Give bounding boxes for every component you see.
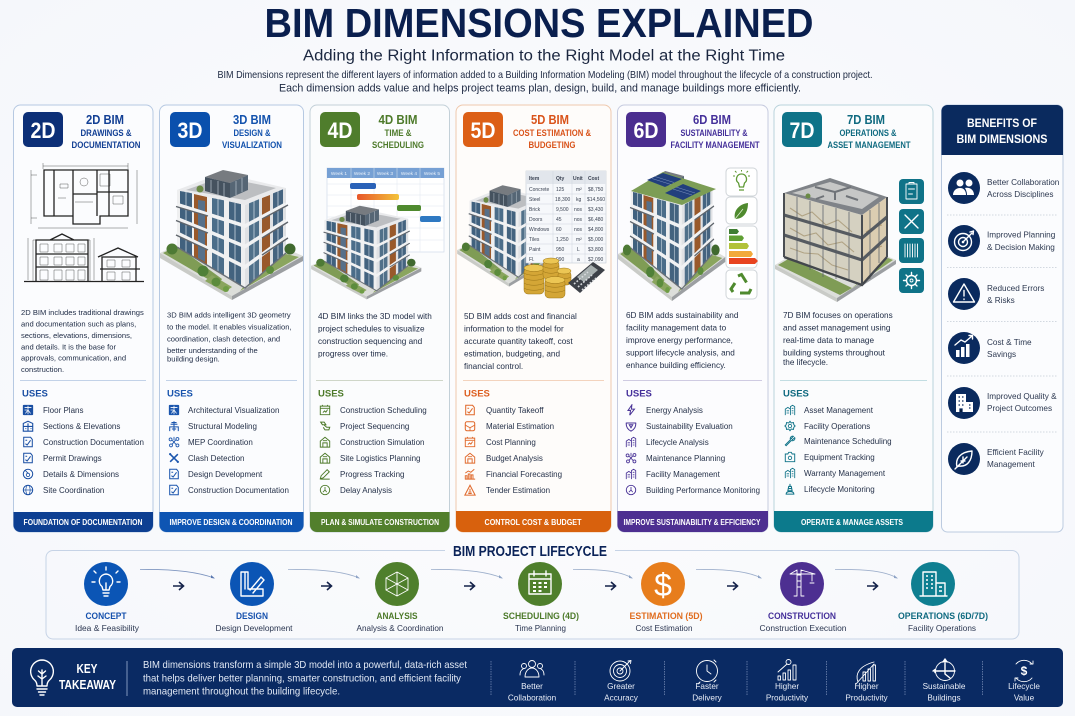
badge: 3D: 3D	[178, 118, 202, 143]
key takeaway text	[143, 660, 467, 698]
value: better collaboration: Collaboration	[508, 694, 557, 702]
heading: 5D BIM: 5D BIM	[531, 113, 569, 127]
badge: 3D	[170, 112, 210, 147]
uses list	[167, 388, 289, 495]
value: faster delivery: Delivery	[692, 694, 723, 702]
panel: benefits	[942, 105, 1063, 532]
heading: 6D BIM: SUSTAINABILITY &	[680, 128, 748, 139]
description	[21, 308, 144, 374]
illustration: cost table: Qty	[556, 176, 565, 182]
illustration: cut-away building	[775, 178, 896, 302]
description: and documentation such as plans,	[21, 320, 136, 328]
use: Construction Documentation: Construction Documentation	[43, 438, 144, 447]
lifecycle frame	[46, 543, 1019, 639]
icon tile: equipment	[899, 238, 924, 263]
key takeaway label: TAKEAWAY	[59, 677, 116, 692]
use: Site Coordination: Site Coordination	[43, 486, 104, 495]
stage: concept: CONCEPT	[86, 611, 127, 621]
use: Lifecycle Analysis: Lifecycle Analysis	[646, 438, 709, 447]
stage: estimation: ESTIMATION (5D)	[630, 611, 702, 621]
stage: analysis: Analysis & Coordination	[356, 624, 444, 633]
key takeaway text: management throughout the building lifecycle.	[143, 686, 340, 698]
stage: scheduling: SCHEDULING (4D)	[503, 611, 579, 621]
description: 7D BIM focuses on operations	[783, 311, 893, 320]
benefit: quality: Project Outcomes	[987, 404, 1052, 413]
heading: 5D BIM: COST ESTIMATION &	[513, 128, 591, 139]
value: higher productivity	[766, 660, 809, 702]
use: Sections & Elevations: Sections & Elevations	[43, 422, 120, 431]
use: Construction Documentation: Construction Documentation	[188, 486, 289, 495]
badge: 7D: 7D	[790, 118, 814, 143]
badge: 2D: 2D	[30, 118, 56, 143]
illustration: cost table: $2,090	[588, 257, 604, 263]
illustration: cost table: Doors	[529, 217, 543, 223]
use: Facility Operations: Facility Operations	[804, 422, 870, 431]
icon tile: tools	[899, 209, 924, 234]
benefit: planning: & Decision Making	[987, 243, 1055, 252]
description: coordination, clash detection, and	[167, 334, 280, 344]
title: BIM DIMENSIONS EXPLAINED	[264, 0, 814, 46]
illustration: cost table: Brick	[529, 207, 541, 213]
use: Permit Drawings: Permit Drawings	[43, 454, 102, 463]
illustration: elevations	[24, 234, 144, 282]
stage: estimation: $	[654, 567, 672, 603]
illustration: cost table: $3,430	[588, 207, 604, 213]
value: sustainable buildings: Sustainable	[923, 682, 966, 691]
footer band	[14, 512, 153, 532]
stage: operations: OPERATIONS (6D/7D)	[898, 611, 988, 621]
heading: 6D BIM: 6D BIM	[693, 113, 731, 127]
footer band: PLAN & SIMULATE CONSTRUCTION	[321, 517, 439, 527]
illustration: cost table: Tiles	[529, 237, 540, 243]
use: Warranty Management: Warranty Management	[804, 469, 886, 478]
description: the lifecycle.	[783, 358, 828, 367]
description: building systems throughout	[783, 348, 886, 358]
value: sustainable buildings	[923, 659, 966, 702]
description: information to the model for	[464, 324, 564, 334]
illustration: cost table: L	[577, 247, 580, 253]
stage: operations	[898, 562, 988, 633]
stage: concept	[75, 562, 140, 633]
description: financial control.	[464, 362, 523, 371]
heading: 5D BIM: BUDGETING	[528, 140, 576, 151]
subtitle: Adding the Right Information to the Right Model at the Right Time	[303, 48, 785, 64]
value: lifecycle value: $	[1021, 664, 1028, 678]
footer band	[618, 511, 768, 532]
badge: 4D	[320, 112, 360, 147]
uses list: USES	[464, 388, 490, 400]
lifecycle title: BIM PROJECT LIFECYCLE	[453, 543, 607, 560]
footer band	[160, 512, 304, 532]
footer band	[456, 511, 611, 532]
benefits header: BENEFITS OF	[967, 116, 1037, 130]
footer band: IMPROVE DESIGN & COORDINATION	[170, 517, 292, 527]
use: Sustainability Evaluation: Sustainability Evaluation	[646, 422, 733, 431]
uses list	[626, 388, 760, 495]
stage: design: DESIGN	[236, 611, 268, 621]
use: Building Performance Monitoring: Building Performance Monitoring	[646, 486, 760, 495]
description	[464, 312, 577, 371]
benefit: collaboration: Across Disciplines	[987, 190, 1053, 199]
heading: 2D BIM: 2D BIM	[86, 113, 124, 127]
illustration: cost table: 950	[556, 247, 565, 253]
illustration: cost table: Cost	[588, 176, 599, 182]
stage: construction: Construction Execution	[760, 624, 847, 633]
uses list: USES	[318, 388, 344, 400]
key takeaway text: BIM dimensions transform a simple 3D model into a powerful, data-rich asset	[143, 660, 467, 671]
use: Construction Scheduling: Construction Scheduling	[340, 406, 427, 415]
icon tile: energy rating	[726, 226, 758, 268]
illustration: building	[311, 206, 421, 299]
intro text: BIM Dimensions represent the different layers of information added to a Building Information Modeling (BIM) model throughout the lifecycle of a construction project.	[218, 70, 872, 81]
description: 2D BIM includes traditional drawings	[21, 308, 144, 317]
illustration: cost table: a	[577, 257, 580, 263]
heading: 2D BIM: DRAWINGS &	[80, 128, 132, 139]
illustration: cost table: $8,750	[588, 187, 604, 193]
icon tile: recycling	[726, 270, 757, 299]
stage: analysis: ANALYSIS	[376, 611, 418, 621]
illustration: gold coins	[524, 258, 571, 298]
description: approvals, communication, and	[21, 354, 126, 362]
description: real-time data to manage	[783, 336, 874, 345]
heading: 6D BIM	[670, 113, 760, 151]
value: higher productivity: Productivity	[766, 694, 809, 702]
benefit: errors	[948, 278, 1044, 310]
use: MEP Coordination: MEP Coordination	[188, 438, 253, 447]
illustration: cost table: Paint	[529, 247, 541, 253]
illustration: cost table: Steel	[529, 197, 540, 203]
illustration: cost table: 125	[556, 187, 565, 193]
key takeaway bar	[12, 648, 1063, 707]
illustration: cost table: 45	[556, 217, 562, 223]
stage: construction: CONSTRUCTION	[768, 611, 836, 621]
use: Progress Tracking: Progress Tracking	[340, 470, 404, 479]
illustration: cost table: Windows	[529, 227, 550, 233]
flow arrow	[573, 569, 633, 590]
heading: 2D BIM	[72, 113, 141, 151]
heading: 3D BIM: VISUALIZATION	[222, 140, 282, 151]
badge: 5D	[463, 112, 503, 147]
panel: 3D BIM	[160, 105, 304, 532]
badge: 6D	[626, 112, 666, 147]
benefit: collaboration	[948, 172, 1060, 204]
footer band	[774, 511, 933, 532]
description	[626, 311, 739, 370]
use: Delay Analysis: Delay Analysis	[340, 486, 392, 495]
benefit: collaboration: Better Collaboration	[987, 178, 1060, 187]
description: support lifecycle analysis, and	[626, 348, 735, 358]
icon: key takeaway bulb	[31, 660, 53, 695]
description: project schedules to visualize	[318, 324, 425, 334]
key takeaway text: that helps deliver better planning, smarter construction, and efficient facility	[143, 674, 462, 684]
illustration: Gantt chart: Week 4	[401, 171, 417, 177]
value: higher productivity, growth	[845, 662, 889, 702]
benefit: cost and time	[948, 332, 1032, 364]
use: Equipment Tracking: Equipment Tracking	[804, 453, 875, 462]
heading: 6D BIM: FACILITY MANAGEMENT	[670, 140, 760, 151]
description	[783, 311, 893, 367]
illustration: cost table: 090	[556, 257, 565, 263]
description: and details. It is the base for	[21, 342, 116, 352]
benefit: cost and time: Cost & Time	[987, 338, 1032, 347]
illustration: cost table: $6,480	[588, 217, 604, 223]
illustration: cost table: $3,800	[588, 247, 604, 253]
description: and asset management using	[783, 324, 891, 332]
heading: 4D BIM: SCHEDULING	[372, 140, 424, 151]
illustration: cost table: 60	[556, 227, 562, 233]
flow arrow	[140, 569, 215, 590]
description: facility management data to	[626, 324, 727, 332]
use: Clash Detection: Clash Detection	[188, 454, 244, 463]
use: Tender Estimation: Tender Estimation	[486, 486, 550, 495]
use: Site Logistics Planning: Site Logistics Planning	[340, 454, 420, 463]
heading: 3D BIM: 3D BIM	[233, 113, 271, 127]
illustration: Gantt chart: Week 2	[354, 171, 370, 177]
use: Project Sequencing: Project Sequencing	[340, 422, 409, 431]
description: improve energy performance,	[626, 336, 733, 345]
uses list: USES	[22, 388, 48, 400]
value: greater accuracy: Greater	[607, 682, 635, 691]
description: progress over time.	[318, 350, 388, 358]
use: Floor Plans: Floor Plans	[43, 406, 83, 415]
use: Quantity Takeoff: Quantity Takeoff	[486, 406, 544, 415]
flow arrow	[835, 569, 898, 590]
key takeaway label: KEY	[76, 661, 98, 676]
use: Details & Dimensions: Details & Dimensions	[43, 470, 119, 479]
illustration: Gantt chart	[327, 168, 444, 252]
stage: construction	[760, 562, 847, 633]
value: lifecycle value	[1008, 660, 1040, 702]
value: better collaboration: Better	[521, 682, 543, 691]
icon tile: clipboard	[899, 179, 924, 204]
illustration: cost table: 9,500	[556, 207, 569, 213]
description: 5D BIM adds cost and financial	[464, 312, 577, 321]
icon tile: lightbulb	[726, 168, 757, 196]
illustration: cost table: Fl.	[529, 257, 535, 263]
footer band: FOUNDATION OF DOCUMENTATION	[24, 517, 142, 527]
footer band: CONTROL COST & BUDGET	[484, 517, 582, 527]
value: greater accuracy	[604, 660, 639, 702]
benefit: quality	[948, 387, 1057, 419]
footer band	[310, 512, 450, 532]
use: Facility Management: Facility Management	[646, 470, 721, 479]
benefit: facility management: Efficient Facility	[987, 448, 1045, 457]
benefits header	[942, 105, 1063, 155]
benefit: facility management: Management	[987, 460, 1036, 469]
panel: 4D BIM	[310, 105, 450, 532]
value: higher productivity: Higher	[775, 682, 799, 691]
benefit: planning	[948, 225, 1056, 257]
badge: 4D: 4D	[328, 118, 352, 143]
use: Maintenance Scheduling: Maintenance Scheduling	[804, 437, 892, 446]
stage: design	[216, 562, 293, 633]
description: 3D BIM adds intelligent 3D geometry	[167, 310, 291, 320]
value: better collaboration	[508, 660, 557, 702]
heading: 7D BIM	[828, 113, 911, 151]
illustration: cost table: nos	[574, 227, 583, 233]
stage: estimation: Cost Estimation	[636, 624, 693, 633]
stage: scheduling: Time Planning	[515, 624, 566, 633]
key takeaway label	[59, 661, 116, 692]
value: higher productivity, growth: Productivity	[845, 694, 889, 702]
use: Financial Forecasting: Financial Forecasting	[486, 470, 562, 479]
benefit: quality: Improved Quality &	[987, 392, 1057, 401]
value: greater accuracy: Accuracy	[604, 694, 639, 702]
description: enhance building efficiency.	[626, 361, 726, 370]
value: higher productivity, growth: Higher	[854, 682, 879, 691]
uses list	[22, 388, 144, 495]
use: Construction Simulation: Construction Simulation	[340, 438, 424, 447]
footer band: OPERATE & MANAGE ASSETS	[801, 517, 903, 527]
badge: 2D	[23, 112, 63, 147]
stage: design: Design Development	[216, 624, 293, 633]
benefit: planning: Improved Planning	[987, 230, 1056, 240]
use: Lifecycle Monitoring: Lifecycle Monitoring	[804, 485, 875, 494]
description	[167, 310, 292, 364]
uses list: USES	[167, 388, 193, 400]
flow arrow	[288, 569, 360, 590]
panel: 7D BIM	[774, 105, 933, 532]
uses list	[464, 388, 562, 495]
panel: 2D BIM	[14, 105, 153, 532]
badge: 5D: 5D	[470, 118, 496, 143]
use: Maintenance Planning: Maintenance Planning	[646, 454, 725, 463]
heading: 4D BIM: 4D BIM	[378, 113, 418, 127]
heading: 3D BIM	[222, 113, 282, 151]
illustration: cost table: $5,000	[588, 237, 604, 243]
illustration: cost table: $14,560	[587, 197, 605, 203]
value: faster delivery	[692, 660, 723, 702]
benefit: cost and time: Savings	[987, 350, 1016, 359]
heading: 7D BIM: ASSET MANAGEMENT	[828, 140, 911, 151]
badge: 6D: 6D	[634, 118, 658, 143]
illustration: floor plan	[31, 163, 137, 228]
intro text: Each dimension adds value and helps project teams plan, design, build, and manage buildings more efficiently.	[279, 82, 801, 94]
use: Design Development: Design Development	[188, 470, 263, 479]
use: Structural Modeling: Structural Modeling	[188, 422, 257, 431]
value: lifecycle value: Value	[1014, 694, 1035, 702]
description: building design.	[167, 354, 220, 364]
benefit: errors: Reduced Errors	[987, 284, 1044, 293]
illustration: cost table: Concrete	[529, 187, 550, 193]
value: lifecycle value: Lifecycle	[1008, 682, 1040, 691]
stage: estimation	[630, 562, 702, 633]
benefits header: BIM DIMENSIONS	[956, 132, 1048, 146]
illustration: cost table: 18,300	[555, 197, 571, 203]
heading: 3D BIM: DESIGN &	[234, 128, 271, 139]
description: accurate quantity takeoff, cost	[464, 337, 573, 346]
heading: 4D BIM: TIME &	[384, 128, 412, 139]
illustration: cost table: Unit	[573, 176, 583, 182]
footer band: IMPROVE SUSTAINABILITY & EFFICIENCY	[624, 517, 761, 527]
description	[318, 312, 432, 358]
use: Asset Management: Asset Management	[804, 406, 874, 415]
description: estimation, budgeting, and	[464, 350, 560, 358]
uses list	[318, 388, 427, 495]
benefit: errors: & Risks	[987, 296, 1015, 305]
use: Material Estimation: Material Estimation	[486, 422, 554, 431]
stage: operations: Facility Operations	[908, 624, 976, 633]
heading: 4D BIM	[372, 113, 424, 151]
illustration: green building	[618, 171, 725, 301]
heading: 2D BIM: DOCUMENTATION	[72, 140, 141, 151]
use: Energy Analysis: Energy Analysis	[646, 406, 703, 415]
use: Cost Planning: Cost Planning	[486, 438, 536, 447]
value: faster delivery: Faster	[695, 682, 719, 691]
illustration: cost table: Item	[529, 176, 540, 182]
uses list: USES	[783, 388, 809, 400]
description: construction.	[21, 365, 64, 374]
illustration: Gantt chart: Week 5	[424, 171, 440, 177]
benefit: facility management	[948, 443, 1045, 475]
illustration: 3D building	[160, 170, 303, 300]
illustration: building	[457, 185, 560, 287]
illustration: cost table: m²	[576, 237, 582, 243]
stage: analysis	[356, 562, 444, 633]
illustration: cost table: nos	[574, 217, 583, 223]
icon tile: gear	[899, 268, 924, 293]
panel: 6D BIM	[618, 105, 768, 532]
description: 6D BIM adds sustainability and	[626, 311, 739, 320]
description: construction sequencing and	[318, 337, 423, 346]
value: sustainable buildings: Buildings	[927, 694, 961, 702]
stage: scheduling	[503, 562, 579, 633]
description: sections, elevations, dimensions,	[21, 331, 132, 340]
illustration: cost table: 1,250	[556, 237, 569, 243]
badge: 7D	[782, 112, 822, 147]
panel: 5D BIM	[456, 105, 611, 532]
description: better understanding of the	[167, 346, 258, 355]
icon tile: leaf	[726, 197, 757, 224]
description: to the model. It enables visualization,	[167, 322, 292, 332]
illustration: Gantt chart: Week 1	[331, 171, 347, 177]
illustration: cost table	[526, 171, 606, 263]
illustration: cost table: $4,800	[588, 227, 604, 233]
description: 4D BIM links the 3D model with	[318, 312, 432, 321]
illustration: calculator	[568, 262, 605, 293]
use: Architectural Visualization: Architectural Visualization	[188, 406, 279, 415]
illustration: cost table: m²	[576, 187, 582, 193]
intro text	[218, 70, 872, 94]
flow arrow	[431, 569, 503, 590]
illustration: Gantt chart: Week 3	[377, 171, 393, 177]
stage: concept: Idea & Feasibility	[75, 624, 140, 633]
heading: 7D BIM: OPERATIONS &	[840, 128, 897, 139]
flow arrow	[696, 569, 762, 590]
illustration: cost table: kg	[576, 197, 582, 203]
heading: 5D BIM	[513, 113, 591, 151]
illustration: cost table: nos	[574, 207, 583, 213]
uses list: USES	[626, 388, 652, 400]
heading: 7D BIM: 7D BIM	[847, 113, 885, 127]
use: Budget Analysis: Budget Analysis	[486, 454, 543, 463]
uses list	[783, 388, 892, 494]
